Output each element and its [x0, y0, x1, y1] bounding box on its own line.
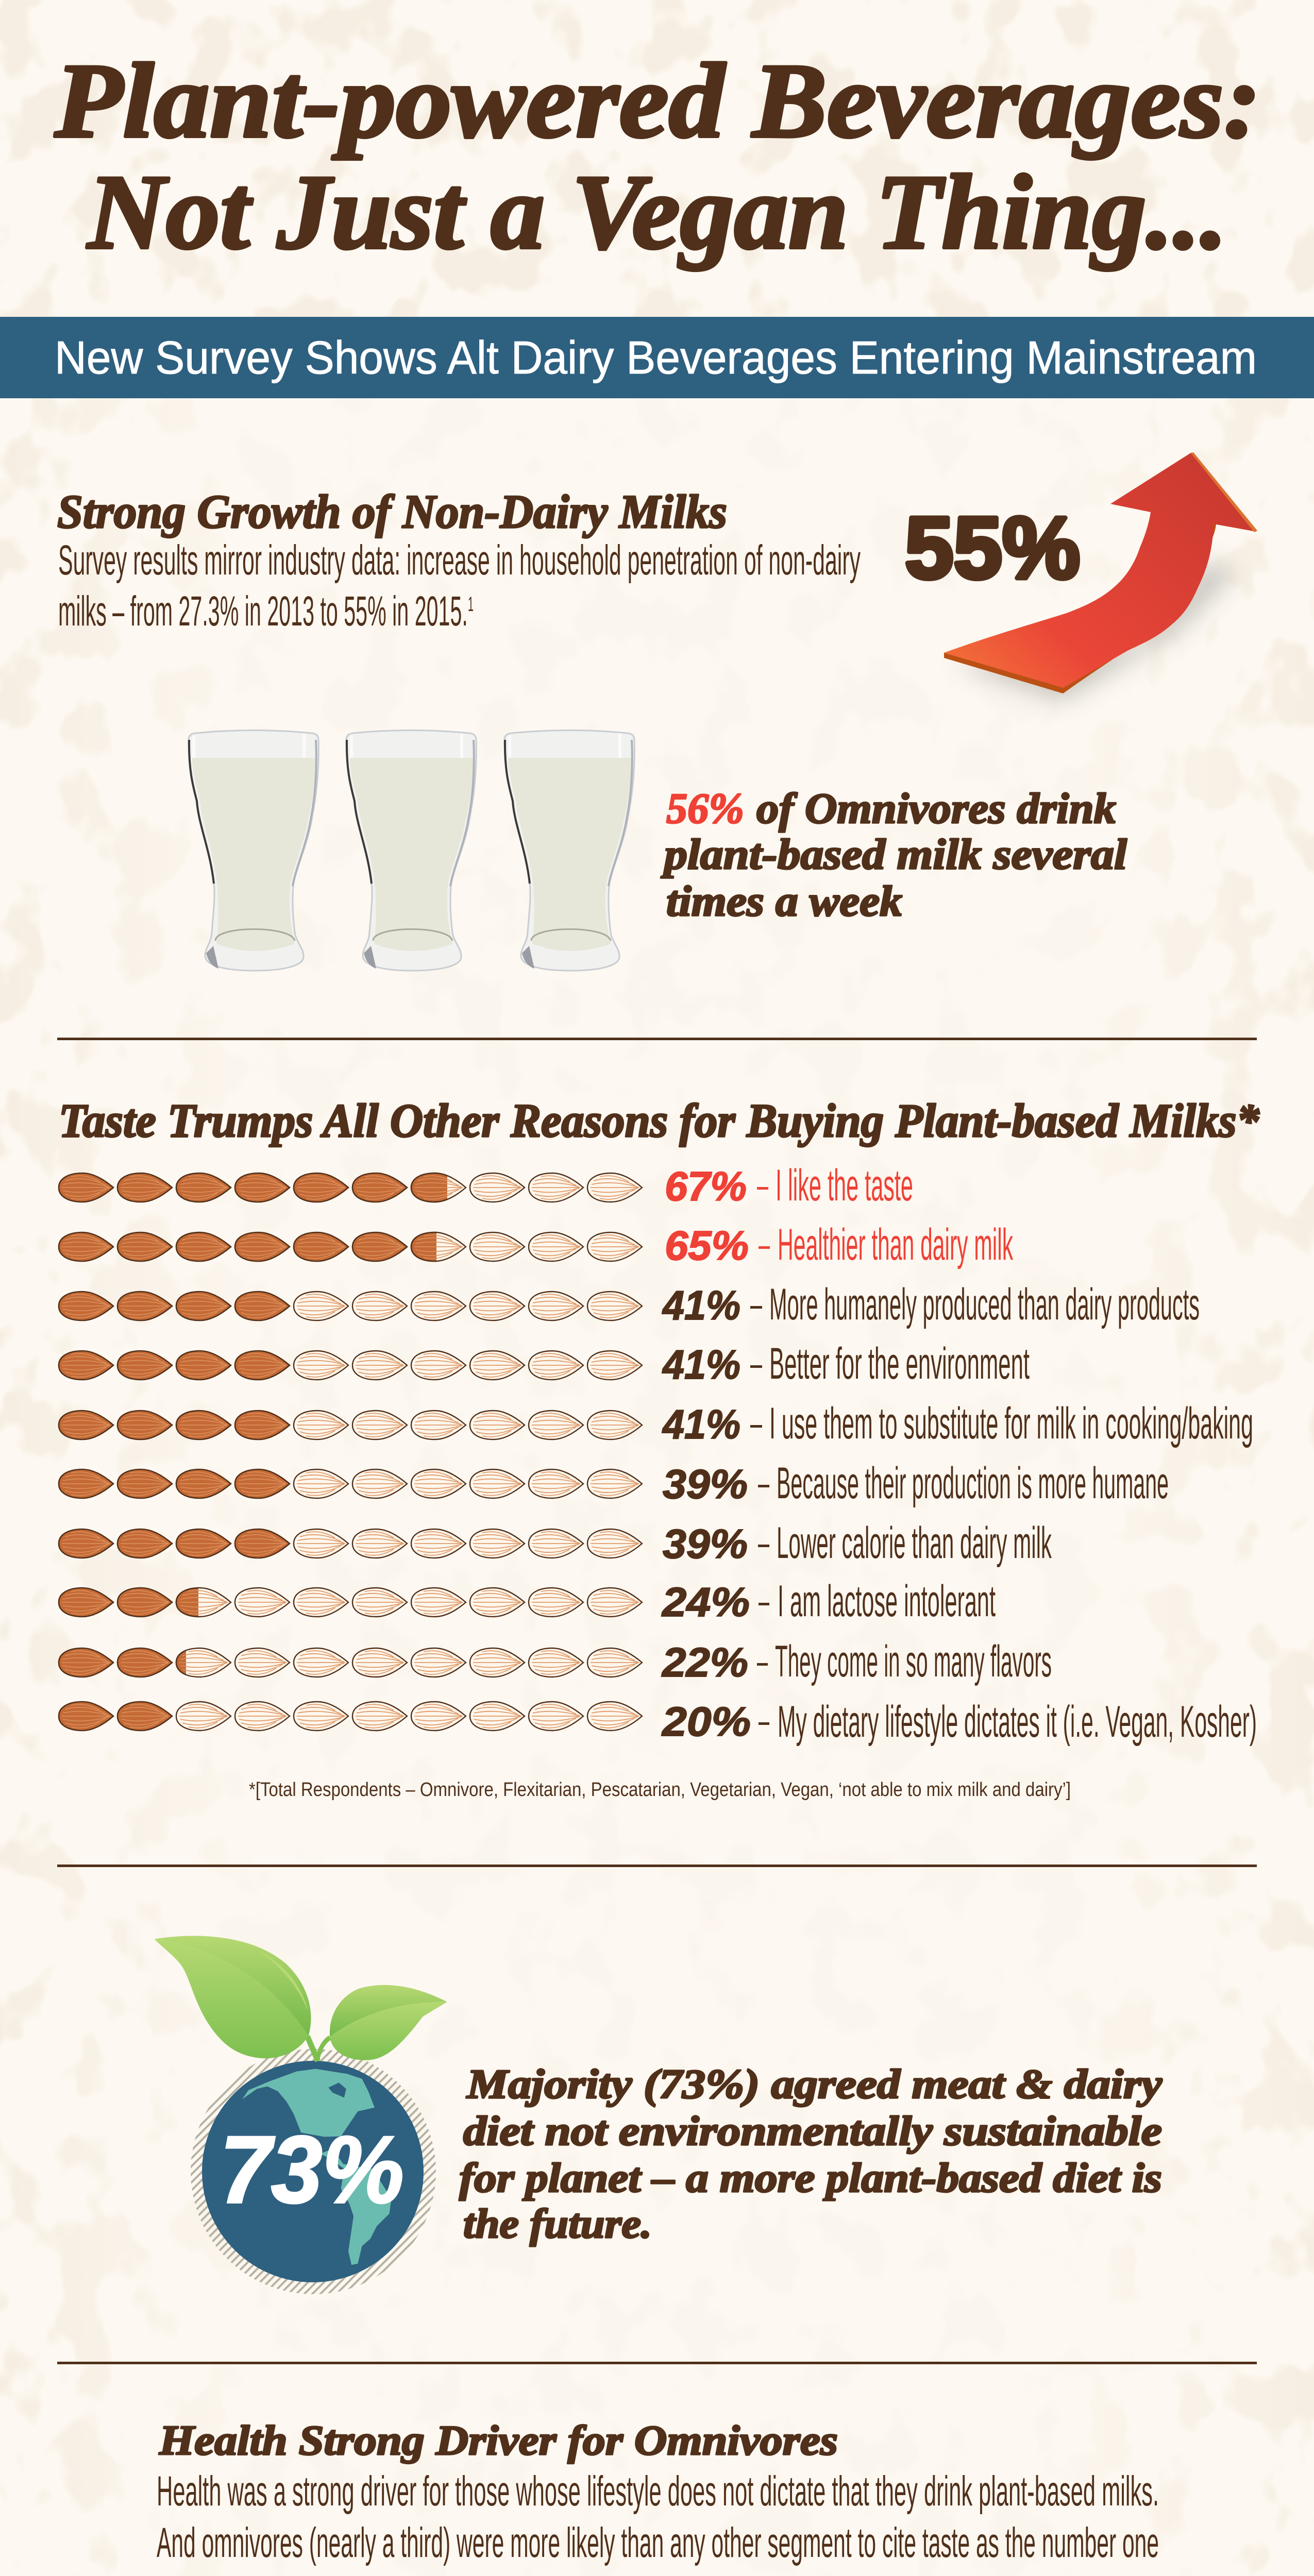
subtitle band: New Survey Shows Alt Dairy Beverages Entering Mainstream [55, 332, 1257, 384]
text: growth description: 1 [468, 593, 474, 616]
subtitle band [0, 317, 1314, 398]
text: majority 73%: for planet – a more plant-based diet is [459, 2156, 1162, 2201]
icon: globe with leaves [154, 1936, 447, 2294]
text: majority 73%: diet not environmentally sustainable [463, 2109, 1162, 2154]
title: Not Just a Vegan Thing... [87, 153, 1227, 271]
text: growth description [58, 537, 861, 635]
text: 56% of omnivores: of Omnivores drink [756, 785, 1116, 833]
row: 67% [58, 1168, 912, 1202]
row: 24%: I am lactose intolerant [778, 1577, 996, 1626]
icon: growth arrow [944, 452, 1257, 702]
row: 41% environment [59, 1339, 1030, 1388]
row: 67%: I like the taste [776, 1161, 913, 1210]
row: 65%: 65% [665, 1223, 749, 1268]
row: 24%: 24% [661, 1579, 750, 1625]
row: 20% [59, 1697, 1257, 1747]
continents [242, 2069, 392, 2265]
stat: 55%: 55% [905, 499, 1080, 597]
row: 24% [58, 1584, 996, 1618]
heading: health strong driver: Health Strong Driver for Omnivores [159, 2417, 838, 2464]
row: 22% [58, 1645, 1051, 1686]
chart: almond pictogram rows: Healthier than dairy milk [778, 1220, 1013, 1269]
chart: almond pictogram rows [59, 1161, 1257, 1747]
text: majority 73% [459, 2062, 1163, 2247]
icon: globe with leaves: 73% [220, 2117, 404, 2223]
row: 41% environment: 41% [662, 1342, 740, 1387]
row: 41% environment: Better for the environment [769, 1339, 1030, 1388]
text: majority 73%: the future. [463, 2201, 652, 2247]
title [54, 42, 1261, 271]
row: 22%: 22% [661, 1639, 748, 1685]
text: 56% of omnivores: times a week [666, 877, 902, 925]
icon: three glasses of milk [189, 731, 634, 971]
text: 56% of omnivores: plant-based milk several [661, 831, 1127, 878]
text: majority 73%: Majority (73%) agreed meat & dairy [466, 2062, 1163, 2107]
heading: strong growth: Strong Growth of Non-Dairy Milks [57, 485, 727, 538]
row: 65% [58, 1227, 1013, 1269]
text: 56% of omnivores [661, 785, 1127, 925]
leaves [154, 1936, 447, 2061]
row: 67%: 67% [665, 1163, 747, 1209]
text: growth description: milks – from 27.3% in 2013 to 55% in 2015. [58, 588, 873, 635]
row: 39% humane: 39% [663, 1461, 748, 1507]
row: 39% lower calorie: 39% [663, 1521, 748, 1567]
row: 41% humanely produced: 41% [662, 1282, 740, 1328]
row: 39% humane [59, 1459, 1169, 1508]
title: Plant-powered Beverages: [54, 42, 1261, 160]
row: 41% humanely produced [59, 1280, 1200, 1329]
row: 41% cooking [59, 1399, 1253, 1448]
row: 20%: 20% [661, 1699, 751, 1744]
heading: taste trumps: Taste Trumps All Other Reasons for Buying Plant-based Milks* [59, 1094, 1260, 1147]
text: health paragraph [157, 2468, 1159, 2576]
footnote: total respondents: *[Total Respondents – Omnivore, Flexitarian, Pescatarian, Vegetarian, Vegan, ‘not able to mix milk and dairy’] [249, 1779, 1071, 1801]
row: 39% lower calorie [59, 1518, 1052, 1568]
text: 56% of omnivores: 56% [666, 785, 744, 833]
row: 41% cooking: 41% [662, 1401, 740, 1447]
